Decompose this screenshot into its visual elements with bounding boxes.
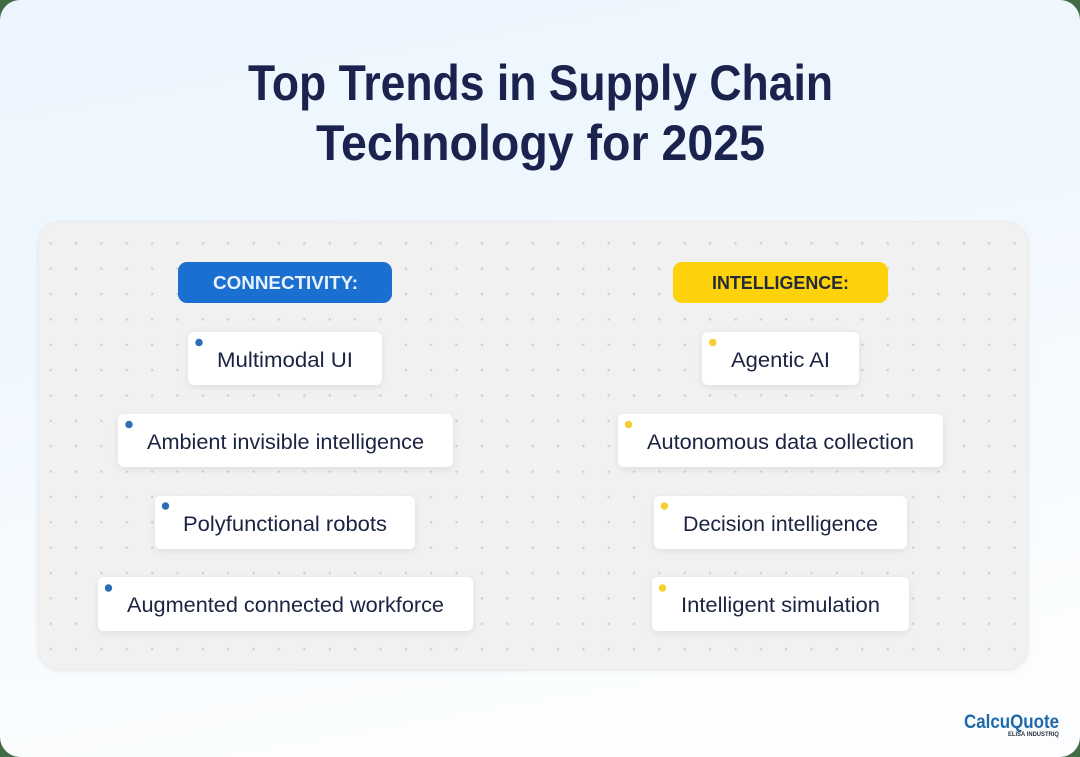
card: Decision intelligence: Decision intelligence [683,512,878,536]
column: intelligence [618,262,943,631]
title [248,55,833,171]
heading pill: connectivity [178,262,392,303]
card: Ambient invisible intelligence: Ambient invisible intelligence [147,430,424,454]
card: Decision intelligence [654,496,907,549]
card: Autonomous data collection: Autonomous data collection [647,430,914,454]
title: Technology for 2025 [316,115,765,171]
card: Polyfunctional robots: Polyfunctional robots [183,512,387,536]
card: Autonomous data collection [618,414,943,467]
heading pill: connectivity: CONNECTIVITY: [213,273,358,293]
card: Multimodal UI: Multimodal UI [217,348,353,372]
card: Augmented connected workforce [98,577,473,631]
panel: dotted trends board [38,222,1028,670]
heading pill: intelligence [673,262,888,303]
heading pill: intelligence: INTELLIGENCE: [712,273,849,293]
card: Ambient invisible intelligence [118,414,453,467]
column: connectivity [98,262,473,631]
card: Multimodal UI [188,332,382,385]
card: Intelligent simulation [652,577,909,631]
card: Intelligent simulation: Intelligent simulation [681,593,880,617]
logo: CalcuQuote: ELISA INDUSTRIQ [1008,731,1059,738]
card: Agentic AI: Agentic AI [731,348,830,372]
logo: CalcuQuote: CalcuQuote [964,712,1059,733]
card: Agentic AI [702,332,859,385]
card: Augmented connected workforce: Augmented connected workforce [127,593,444,617]
card: Polyfunctional robots [155,496,415,549]
title: Top Trends in Supply Chain [248,55,833,111]
